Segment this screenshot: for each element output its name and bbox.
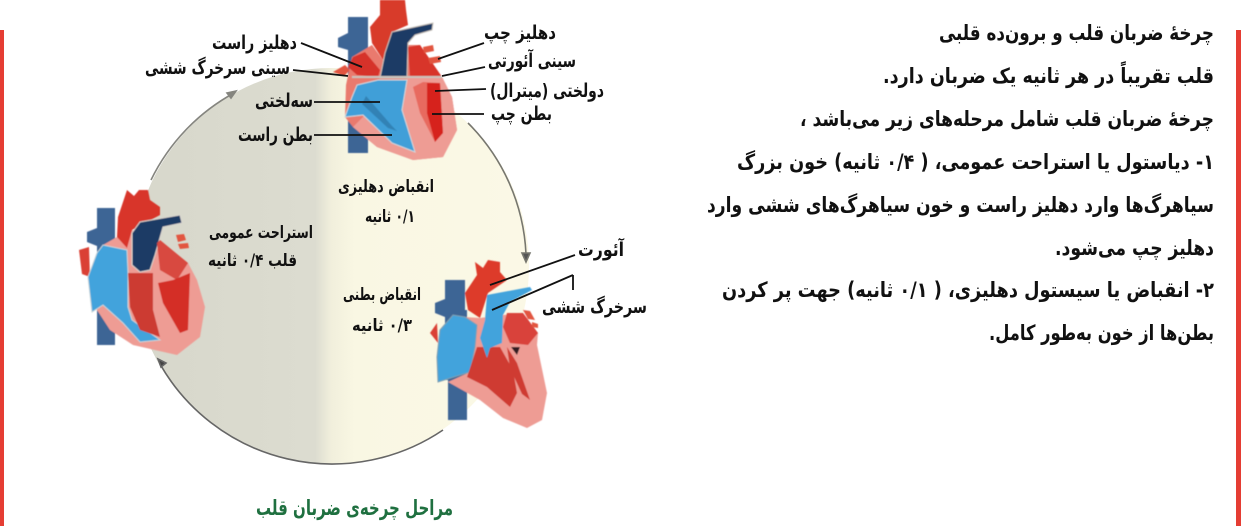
stage label: ventricular systole: ۰/۳ ثانیه <box>352 316 413 336</box>
right red border bar <box>1236 30 1241 526</box>
heading: diagram caption: مراحل چرخه‌ی ضربان قلب <box>256 496 453 520</box>
label: tricuspid: سه‌لختی <box>255 90 313 112</box>
icon: heart ventricular systole (right) <box>430 260 547 428</box>
left red border bar <box>0 30 4 526</box>
icon: heart resting (left) <box>79 190 205 355</box>
stage label: general rest: استراحت عمومی <box>209 223 313 243</box>
label: mitral: دولختی (میترال) <box>490 80 604 102</box>
stage label: ventricular systole <box>343 285 421 336</box>
text block: cardiac cycle description: ۲- انقباض یا سیستول دهلیزی، ( ۰/۱ ثانیه) جهت پر کردن <box>722 278 1214 302</box>
label: pulmonary valve: سینی سرخرگ ششی <box>145 56 290 79</box>
arrow: ventricular systole to rest <box>158 359 443 464</box>
text block: cardiac cycle description <box>707 21 1214 345</box>
diagram labels top heart <box>145 22 604 146</box>
labels: aorta and pulmonary artery: سرخرگ ششی <box>542 295 647 318</box>
label lines top heart <box>293 43 486 135</box>
label: right atrium: دهلیز راست <box>212 32 297 54</box>
panel: cardiac cycle disc <box>133 68 530 464</box>
labels: aorta and pulmonary artery <box>490 237 647 318</box>
stage label: general rest <box>208 223 313 271</box>
stage label: ventricular systole: انقباض بطنی <box>343 285 421 305</box>
arrow: atrial to ventricular systole <box>468 123 530 262</box>
labels: aorta and pulmonary artery: آئورت <box>578 237 624 261</box>
label: aortic valve: سینی آئورتی <box>488 48 576 72</box>
arrow: rest to atrial systole <box>151 91 236 180</box>
icon: heart atrial systole (top) <box>333 0 457 160</box>
stage label: atrial systole <box>338 177 434 227</box>
stage label: general rest: قلب ۰/۴ ثانیه <box>208 251 297 271</box>
stage label: atrial systole: ۰/۱ ثانیه <box>365 207 415 227</box>
label: right ventricle: بطن راست <box>238 124 313 146</box>
stage label: atrial systole: انقباض دهلیزی <box>338 177 434 197</box>
label: left ventricle: بطن چپ <box>491 103 552 125</box>
label: left atrium: دهلیز چپ <box>484 22 556 44</box>
